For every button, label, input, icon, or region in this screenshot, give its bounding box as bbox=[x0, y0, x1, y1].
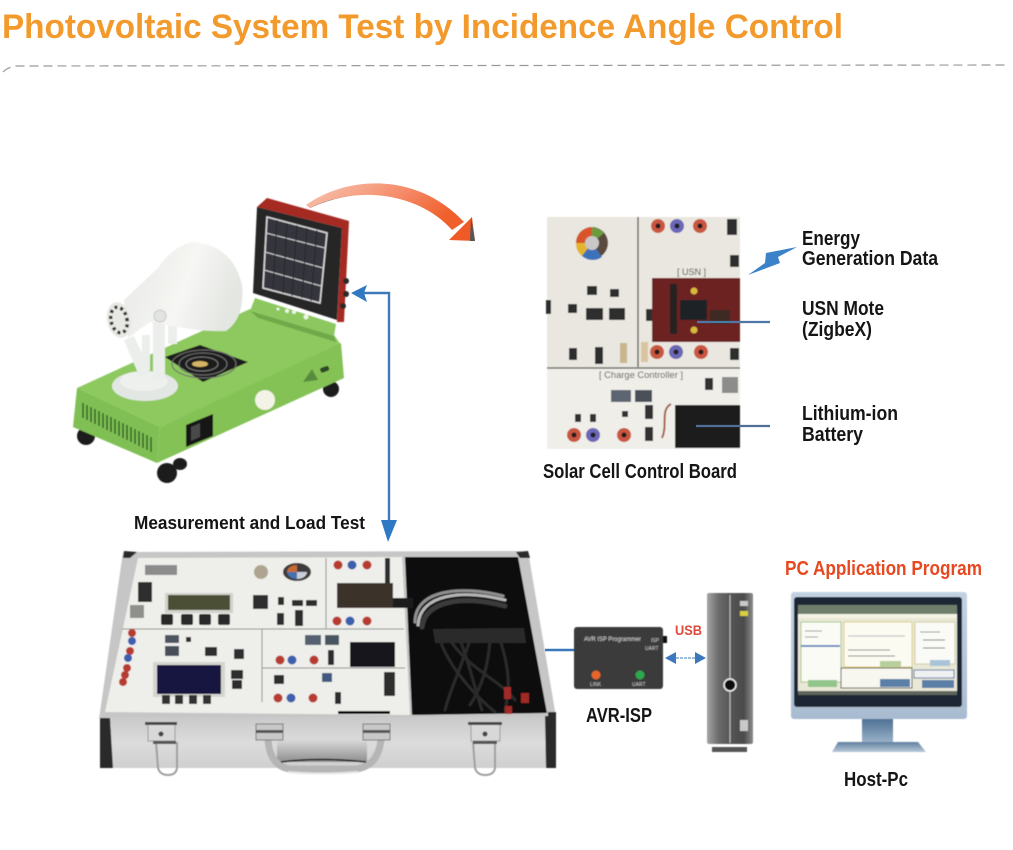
label: USN mote bbox=[802, 298, 884, 341]
label: AVR-ISP: AVR-ISP bbox=[586, 705, 652, 727]
lamp pivot bbox=[154, 310, 166, 322]
programmer body bbox=[574, 627, 663, 689]
charge controller label: [ Charge Controller ] bbox=[599, 370, 683, 380]
black compartment bbox=[405, 557, 547, 715]
window status bar bbox=[798, 691, 957, 695]
photovoltaic test unit bbox=[73, 198, 349, 483]
monitor screen bbox=[794, 597, 962, 707]
connector: case to AVR-ISP bbox=[545, 649, 575, 651]
label: lithium-ion battery: Battery bbox=[802, 424, 864, 446]
window centre pane bbox=[844, 622, 912, 667]
handle shadow bbox=[277, 740, 367, 762]
panel top display bbox=[145, 565, 177, 575]
vent slots bbox=[83, 403, 151, 452]
blue LCD buttons bbox=[162, 695, 211, 704]
AVR-ISP programmer bbox=[574, 627, 667, 689]
title: Photovoltaic System Test by Incidence Angle Control bbox=[2, 8, 843, 46]
white control panel bbox=[105, 557, 410, 715]
sensor bbox=[254, 565, 268, 579]
panel dividers bbox=[122, 558, 405, 702]
lithium-ion battery bbox=[675, 405, 740, 448]
solar panel bbox=[253, 207, 342, 320]
solar cell control board bbox=[546, 217, 740, 449]
cable plug bbox=[393, 598, 413, 608]
label: host-pc: Host-Pc bbox=[844, 769, 908, 791]
label: lithium-ion battery: Lithium-ion bbox=[802, 403, 898, 425]
label: energy generation data: Energy bbox=[802, 228, 861, 250]
tower drive bays bbox=[740, 601, 748, 731]
curved arrow: panel rotation bbox=[306, 183, 475, 241]
window left pane bbox=[801, 622, 841, 687]
banana jacks bbox=[567, 219, 708, 442]
leader line: USN mote bbox=[697, 321, 770, 323]
port labels: ISP bbox=[651, 638, 660, 644]
title divider bbox=[3, 65, 1008, 72]
label: energy generation data bbox=[802, 228, 939, 270]
PC tower bbox=[707, 593, 753, 752]
monitor base bbox=[832, 742, 926, 752]
monitor stand bbox=[862, 718, 893, 742]
green base left face bbox=[73, 388, 160, 463]
green LCD bbox=[165, 593, 233, 613]
monitor bezel bbox=[791, 592, 967, 719]
label: measurement and load test: Measurement and Load Test bbox=[134, 513, 365, 533]
USN mote bbox=[652, 278, 740, 342]
board components bbox=[546, 219, 739, 364]
window title bar bbox=[798, 605, 957, 614]
lamp stand bbox=[124, 313, 177, 379]
panel banana jacks bbox=[119, 560, 372, 702]
port labels: UART bbox=[645, 646, 659, 652]
power socket bbox=[186, 414, 213, 447]
programmer label: AVR ISP Programmer bbox=[584, 637, 641, 643]
charge controller parts bbox=[575, 377, 738, 441]
case lid frame bbox=[99, 551, 556, 719]
coiled cables bbox=[415, 591, 515, 712]
monitor bbox=[791, 592, 967, 752]
label: USN mote: USN Mote bbox=[802, 298, 884, 320]
window right pane bbox=[915, 622, 955, 666]
orange LED: LINK bbox=[590, 682, 602, 688]
LCD buttons bbox=[161, 614, 230, 625]
tower foot bbox=[712, 747, 747, 752]
knob bbox=[255, 390, 275, 410]
icon: lightning bolt bbox=[748, 247, 797, 275]
board dividers bbox=[547, 217, 740, 368]
case handle bbox=[256, 724, 390, 774]
cell grid lines bbox=[264, 233, 325, 286]
solar panel red backplate bbox=[257, 198, 349, 322]
measurement case bbox=[99, 551, 556, 775]
red plugs bbox=[504, 687, 529, 714]
case corners bbox=[100, 551, 556, 768]
bracket holes bbox=[276, 308, 308, 320]
tilted bracket bbox=[250, 298, 336, 336]
right latch bbox=[468, 722, 502, 775]
panel components bbox=[130, 558, 395, 714]
green base right face bbox=[157, 343, 344, 463]
label: USB: USB bbox=[675, 622, 702, 638]
arrow: panel to measurement unit bbox=[351, 285, 397, 542]
programmer port bbox=[663, 636, 667, 643]
solar cell bbox=[263, 217, 327, 303]
unit feet bbox=[77, 381, 339, 483]
label: energy generation data: Generation Data bbox=[802, 248, 939, 270]
tower power button bbox=[724, 679, 736, 691]
lamp base bbox=[112, 371, 178, 401]
small battery bbox=[350, 642, 395, 667]
label: solar cell control board: Solar Cell Control Board bbox=[543, 461, 737, 483]
lamp rear disc bbox=[104, 300, 134, 340]
tower seam bbox=[729, 595, 731, 743]
double arrow: USB bbox=[665, 652, 706, 664]
blue LCD bbox=[153, 662, 225, 697]
label: lithium-ion battery bbox=[802, 403, 898, 446]
lamp head bbox=[124, 242, 242, 338]
board background bbox=[547, 217, 740, 449]
tower body bbox=[707, 593, 753, 744]
leader line: battery bbox=[696, 425, 770, 427]
fan bbox=[165, 345, 248, 382]
colour wheel bbox=[576, 227, 608, 260]
label: USN mote: (ZigbeX) bbox=[802, 319, 872, 341]
USN label: [ USN ] bbox=[677, 267, 706, 277]
logo bbox=[303, 369, 318, 382]
green LED: UART bbox=[632, 682, 646, 688]
cable strap bbox=[433, 628, 526, 643]
green base top bbox=[77, 309, 341, 427]
left latch bbox=[145, 722, 177, 775]
label: PC application program: PC Application Program bbox=[785, 558, 982, 580]
application window bbox=[798, 605, 957, 695]
colour dial bbox=[283, 563, 311, 581]
panel connectors bbox=[340, 278, 349, 309]
window lower bar bbox=[841, 668, 954, 688]
mote board bbox=[337, 583, 393, 608]
case front bbox=[107, 717, 547, 768]
port labels bbox=[645, 638, 660, 652]
